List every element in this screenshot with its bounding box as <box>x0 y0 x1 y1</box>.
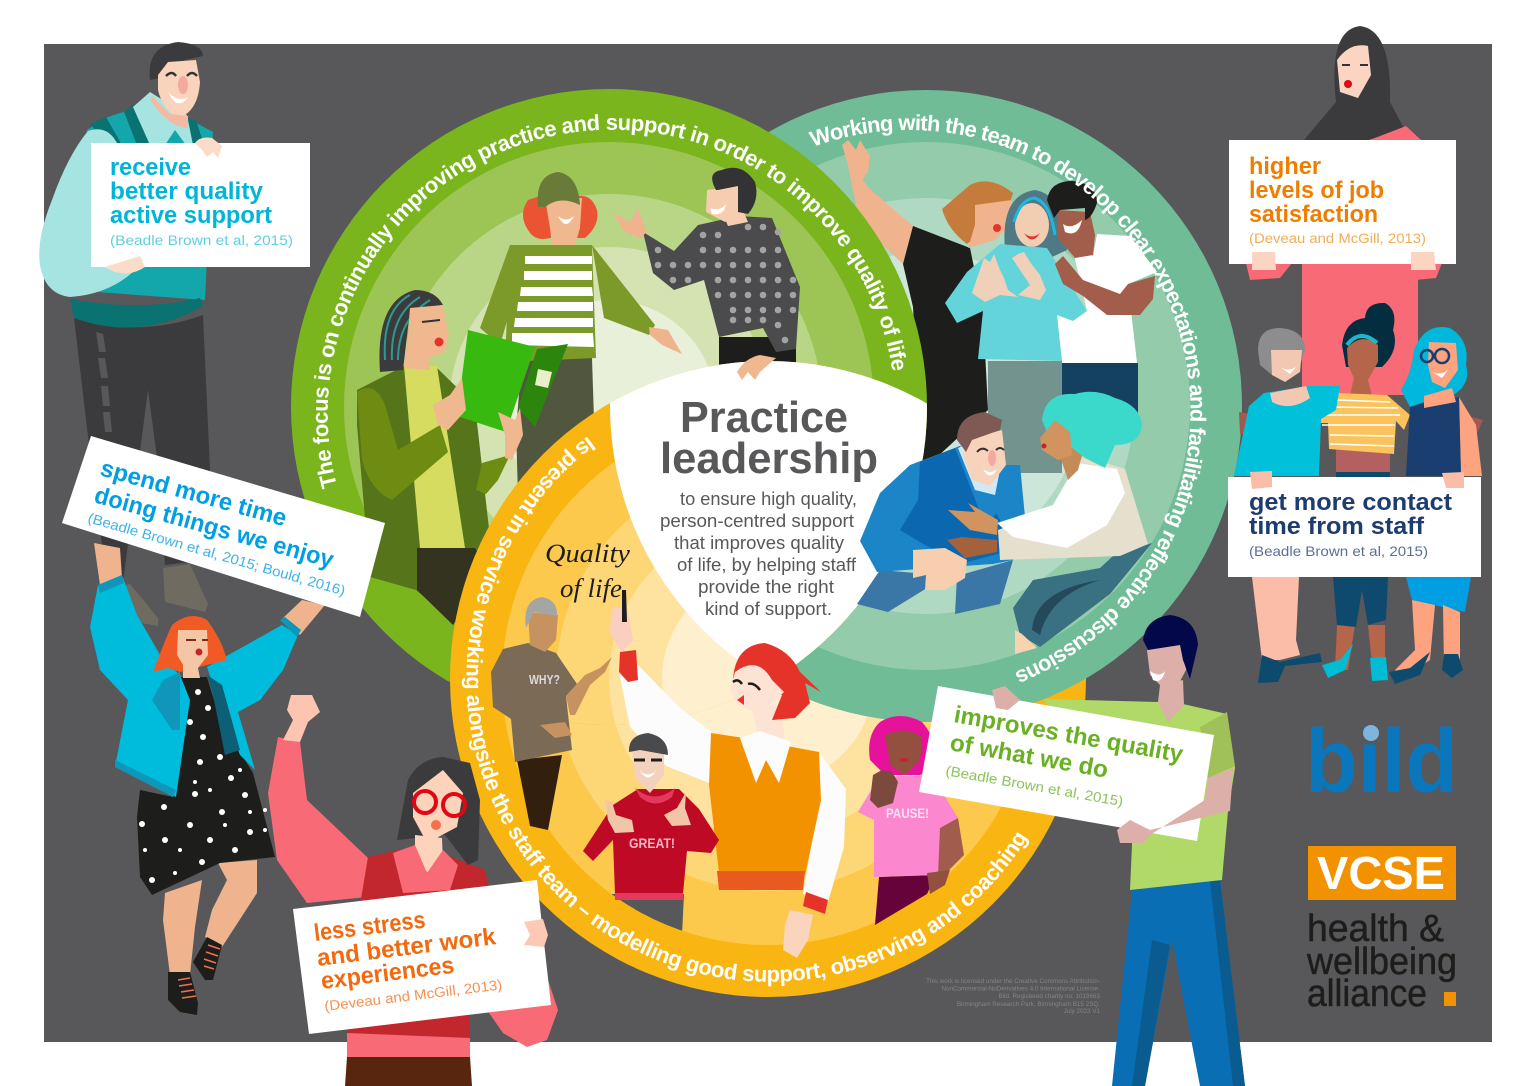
dotted man hand <box>612 208 647 238</box>
right arm skin <box>283 600 325 635</box>
dress <box>1302 263 1418 395</box>
tie knot <box>165 130 186 145</box>
raised hand <box>609 606 633 652</box>
sign: less stress: less stress <box>312 907 427 947</box>
heading <box>660 393 878 483</box>
band <box>1336 472 1390 477</box>
smile <box>168 92 188 103</box>
trousers dark <box>417 548 490 625</box>
smile <box>1280 367 1296 374</box>
smile <box>1063 220 1082 234</box>
hijab <box>1304 26 1405 140</box>
three friends group <box>1234 303 1483 684</box>
sign: get more contact: (Beadle Brown et al, 2015) <box>1249 543 1428 559</box>
sign: spend more time: doing things we enjoy <box>91 482 337 574</box>
headband <box>1347 336 1377 345</box>
why man shirt <box>491 643 577 762</box>
raised arm <box>268 737 368 903</box>
beanie <box>538 172 580 207</box>
centre body text: kind of support. <box>705 599 832 619</box>
middle trousers <box>1333 577 1388 627</box>
lips <box>431 820 441 830</box>
left woman shoes <box>1258 653 1322 683</box>
neck <box>1058 445 1085 480</box>
why arm <box>540 657 612 738</box>
great smile <box>640 771 656 778</box>
glasses <box>1421 349 1449 363</box>
body below sign <box>347 1015 470 1038</box>
smile <box>558 216 574 224</box>
collar <box>740 731 791 783</box>
dotted man hair <box>712 168 756 214</box>
neck <box>415 835 443 873</box>
centre body text <box>660 489 857 619</box>
logo: VCSE health and wellbeing alliance: VCSE <box>1317 847 1445 899</box>
sleeve <box>39 129 150 297</box>
smile <box>983 469 997 476</box>
green circle rings <box>291 89 927 725</box>
trousers <box>1112 880 1245 1086</box>
dotted sweater <box>643 216 800 352</box>
sweater lapel <box>955 445 1015 525</box>
centre body text: person-centred support <box>660 511 854 531</box>
white raised sleeve <box>619 665 715 783</box>
brown hair <box>942 181 1013 244</box>
trouser shade <box>1132 880 1245 1086</box>
grey woman top <box>1234 386 1340 476</box>
pause shirt <box>858 775 958 877</box>
pause label: PAUSE! <box>886 805 929 821</box>
hair streaks <box>385 295 430 360</box>
hair <box>397 757 480 865</box>
right woman tank <box>1406 397 1461 476</box>
lips <box>1344 80 1352 88</box>
blue streaks <box>1014 198 1055 235</box>
left hand behind <box>1239 412 1258 434</box>
yellow circle rings <box>450 361 1086 997</box>
label <box>535 369 552 388</box>
trouser dashes <box>96 332 112 432</box>
middle woman neck and face <box>1347 339 1378 396</box>
licence small print: NonCommercial-NoDerivatives 4.0 International License. <box>941 986 1100 992</box>
arms <box>1246 263 1442 280</box>
great man trousers <box>612 894 684 935</box>
jacket inner <box>207 675 240 755</box>
pink band <box>347 1033 470 1057</box>
person: woman in hijab <box>1246 26 1442 395</box>
sign: spend more time <box>62 436 385 617</box>
neck <box>150 96 188 128</box>
eyes <box>733 680 760 690</box>
sign: improves the quality: (Beadle Brown et al, 2015) <box>944 762 1125 809</box>
why head <box>528 612 558 652</box>
sign: receive better quality active support: active support <box>110 202 272 229</box>
eyes <box>977 448 1004 452</box>
black dress <box>903 226 988 470</box>
jacket <box>357 366 492 622</box>
sign: receive better quality active support: receive <box>110 154 191 181</box>
right sleeve <box>476 455 510 494</box>
raised arm <box>847 161 913 264</box>
thumb hands <box>605 792 691 833</box>
sign: higher levels of job satisfaction: higher <box>1249 153 1321 180</box>
red hair <box>523 196 598 239</box>
face <box>1040 420 1072 460</box>
skirt <box>988 361 1062 473</box>
face <box>1147 640 1186 690</box>
white sleeve right <box>803 752 846 902</box>
dotted man face <box>706 186 745 222</box>
why hair <box>525 597 557 628</box>
hair <box>957 412 1002 452</box>
skirt shadow <box>1032 580 1100 635</box>
man neck and face <box>1057 210 1095 258</box>
lapel <box>152 672 180 730</box>
vest <box>70 108 213 300</box>
sign: get more contact: time from staff <box>1249 513 1425 540</box>
face <box>404 305 449 370</box>
eye <box>422 320 440 322</box>
yellow circle overlapping green lens <box>450 361 927 725</box>
great head <box>632 750 664 793</box>
jacket hem <box>115 760 176 797</box>
yellow top <box>404 366 465 548</box>
hands on contact sign <box>1250 471 1464 489</box>
chest <box>1270 386 1310 406</box>
turquoise hair <box>1042 392 1142 468</box>
hands on higher sign <box>1252 252 1436 270</box>
dotted man neck <box>722 208 748 226</box>
centre body text: that improves quality <box>674 533 844 553</box>
right legs <box>1395 600 1460 680</box>
sign: higher levels of job satisfaction: levels of job <box>1249 177 1384 204</box>
sign: improves the quality: of what we do <box>948 729 1110 784</box>
handwritten quality of life: Quality <box>545 539 630 568</box>
face <box>963 430 1006 486</box>
lips <box>737 695 744 705</box>
sign: get more contact: get more contact <box>1249 489 1452 516</box>
neck <box>183 665 200 678</box>
woman sleeve <box>997 463 1125 548</box>
nose <box>178 76 188 94</box>
pause face <box>885 730 922 775</box>
shorts <box>1060 363 1138 419</box>
eyes <box>186 639 208 641</box>
grey hair <box>1004 190 1067 258</box>
green circle people <box>357 168 800 625</box>
curved text: yellow ring: Is present in service working alongside the staff team – modelling good support, observing and coaching <box>462 436 1030 986</box>
trousers <box>74 315 210 590</box>
smile <box>1432 370 1448 378</box>
hand left <box>433 378 466 430</box>
sweater <box>945 244 1087 361</box>
dark hair <box>1047 181 1097 220</box>
face <box>968 200 1012 248</box>
heart hands <box>972 252 1046 302</box>
teal circle back group: three friends <box>842 140 1157 473</box>
sign: less stress: experiences <box>319 952 456 995</box>
vest <box>360 845 490 905</box>
pause hair <box>869 716 938 775</box>
white shirt <box>1057 234 1157 363</box>
licence small print: This work is licensed under the Creative Commons Attribution- <box>926 978 1100 985</box>
fist <box>283 695 320 742</box>
heading: Practice <box>680 393 848 442</box>
dotted man smile <box>710 204 726 214</box>
pale hand <box>913 548 967 590</box>
lips <box>196 648 202 656</box>
left arm skin <box>94 543 122 585</box>
shirt <box>1043 699 1235 890</box>
raised hand <box>842 140 870 185</box>
pause raised hand <box>870 770 898 808</box>
woman cardigan <box>998 456 1148 560</box>
neck <box>752 705 785 745</box>
shirt <box>1319 393 1410 454</box>
teal circle rings <box>610 90 1242 722</box>
sign: less stress: and better work <box>315 923 498 972</box>
brown hand <box>947 537 997 558</box>
handwritten quality of life: of life <box>560 574 622 603</box>
trousers <box>516 358 594 495</box>
logo: VCSE health and wellbeing alliance: wellbeing <box>1306 941 1457 983</box>
cuffs <box>98 575 301 637</box>
face <box>177 630 208 668</box>
dotted man trousers <box>719 337 796 369</box>
folder back <box>518 344 568 427</box>
sign: spend more time: spend more time <box>97 455 290 532</box>
cyan sandals <box>1322 644 1388 681</box>
shirt <box>133 92 193 145</box>
face <box>1337 45 1371 98</box>
vest stripes <box>70 105 204 328</box>
logo: VCSE health and wellbeing alliance <box>1306 846 1457 1015</box>
sweater <box>860 446 1025 572</box>
person: man in green t-shirt <box>1043 615 1245 1086</box>
collar <box>393 845 458 893</box>
boots <box>168 937 222 1015</box>
eyes <box>166 73 197 76</box>
grey hair <box>1258 328 1305 375</box>
sign: get more contact <box>1228 477 1481 577</box>
why label: WHY? <box>529 672 560 687</box>
face <box>1015 203 1049 247</box>
licence small print: Birmingham Research Park, Birmingham B15 2SQ. <box>957 1001 1100 1008</box>
shoes <box>113 564 208 626</box>
blue hair <box>1401 327 1467 407</box>
curved text: green ring: The focus is on continually improving practice and support in order to improve quality of life <box>312 114 906 490</box>
leg <box>1015 630 1037 654</box>
logo: VCSE health and wellbeing alliance: health & <box>1307 908 1444 950</box>
right shorts <box>1406 577 1471 612</box>
smile <box>1024 233 1040 240</box>
sign: improves the quality <box>919 686 1214 841</box>
pause arm <box>938 818 964 873</box>
hand on less stress sign <box>524 919 548 947</box>
face <box>1271 350 1302 382</box>
hair <box>379 290 443 372</box>
sign: receive better quality active support <box>91 143 310 267</box>
licence small print: Bild. Registered charity no: 1019663 <box>998 993 1100 1000</box>
left woman legs <box>1252 577 1300 660</box>
great man sweater <box>583 789 719 894</box>
stripe man hand <box>649 327 682 354</box>
lower hand <box>783 910 813 958</box>
folder <box>457 330 535 432</box>
arm <box>1055 256 1155 315</box>
middle hair <box>1342 303 1395 367</box>
nose <box>988 450 996 466</box>
pause lips <box>899 758 909 762</box>
face <box>730 665 784 712</box>
sleeve <box>1200 712 1235 778</box>
sign: higher levels of job satisfaction: (Deveau and McGill, 2013) <box>1249 230 1426 246</box>
sign: spend more time: (Beadle Brown et al, 2015; Bould, 2016) <box>86 510 347 598</box>
striped sweater <box>505 245 596 362</box>
centre body text: to ensure high quality, <box>680 489 857 509</box>
eyes <box>1342 64 1368 66</box>
jacket <box>90 575 298 797</box>
neck <box>1158 680 1184 722</box>
shirt stripes <box>1322 400 1400 446</box>
midriff <box>1336 449 1390 473</box>
red cuff right <box>803 892 828 914</box>
heading: leadership <box>660 434 878 483</box>
face <box>158 60 200 118</box>
legs <box>163 860 257 975</box>
hair <box>1143 615 1198 679</box>
great eyes <box>634 758 662 762</box>
red hair <box>733 643 821 720</box>
middle legs <box>1335 625 1385 670</box>
dotted man hand on white <box>737 355 776 380</box>
chest <box>1424 388 1456 408</box>
white centre shape <box>610 361 927 664</box>
sign: receive better quality active support: (Beadle Brown et al, 2015) <box>110 232 293 248</box>
teal circle front group: man and woman <box>857 392 1152 654</box>
brown trousers <box>345 1057 472 1086</box>
hair <box>153 616 227 672</box>
right hand behind <box>1464 415 1483 436</box>
red cuff <box>619 650 638 682</box>
hair <box>150 42 203 80</box>
hem <box>615 893 683 900</box>
navy sandals <box>1389 652 1463 684</box>
right woman arm <box>1459 397 1482 476</box>
centre body text: provide the right <box>698 577 834 597</box>
lips <box>1042 444 1046 448</box>
why man trousers <box>517 755 562 830</box>
curved text: teal ring: Working with the team to develop clear expectations and facilitating reflective discussions <box>808 114 1206 682</box>
sign: less stress <box>293 880 551 1034</box>
sign: higher levels of job satisfaction: satisfaction <box>1249 201 1378 228</box>
hand right <box>498 408 523 460</box>
handwritten quality of life <box>545 539 630 603</box>
man trousers <box>857 560 1013 614</box>
right arm <box>487 977 558 1047</box>
boot laces <box>178 945 220 998</box>
sign: higher levels of job satisfaction <box>1229 140 1456 264</box>
licence small print: July 2023 V1 <box>1064 1008 1100 1015</box>
stripes <box>512 256 594 347</box>
logo: VCSE health and wellbeing alliance: alliance <box>1307 973 1427 1015</box>
hem <box>717 871 805 890</box>
sweater dark <box>900 446 1005 564</box>
sign: improves the quality: improves the quality <box>952 701 1186 768</box>
centre body text: of life, by helping staff <box>677 555 857 575</box>
collar <box>635 788 675 804</box>
face <box>413 770 463 843</box>
person: jumping woman <box>90 543 325 1015</box>
logo: bild: bild <box>1305 712 1458 812</box>
face <box>545 198 582 245</box>
tan hand <box>948 503 998 535</box>
woman skirt <box>1013 543 1152 647</box>
stripe man arms <box>480 245 655 345</box>
glasses <box>414 791 465 816</box>
great label: GREAT! <box>629 835 675 851</box>
pause trousers <box>875 875 936 925</box>
licence small print <box>926 978 1100 1015</box>
sleeve <box>357 388 448 500</box>
person: man in teal vest <box>39 42 213 626</box>
person: woman with red glasses <box>268 695 558 1086</box>
hands on receive sign <box>105 138 222 274</box>
dress dots <box>139 689 267 883</box>
dress <box>137 677 275 895</box>
pause hand on hip <box>927 870 950 894</box>
pen <box>622 590 627 622</box>
shoulder <box>1367 126 1422 141</box>
lips <box>993 224 1001 232</box>
sign: less stress: (Deveau and McGill, 2013) <box>323 976 503 1014</box>
sign: receive better quality active support: better quality <box>110 178 264 205</box>
face <box>1428 342 1458 388</box>
sweater dots <box>655 224 796 343</box>
lips <box>434 338 444 346</box>
great hair <box>629 733 668 755</box>
orange vest <box>709 733 821 875</box>
arm and hand on improves sign <box>992 686 1233 843</box>
collar <box>958 445 1000 495</box>
yellow circle people <box>491 590 964 958</box>
smile <box>1150 671 1165 681</box>
